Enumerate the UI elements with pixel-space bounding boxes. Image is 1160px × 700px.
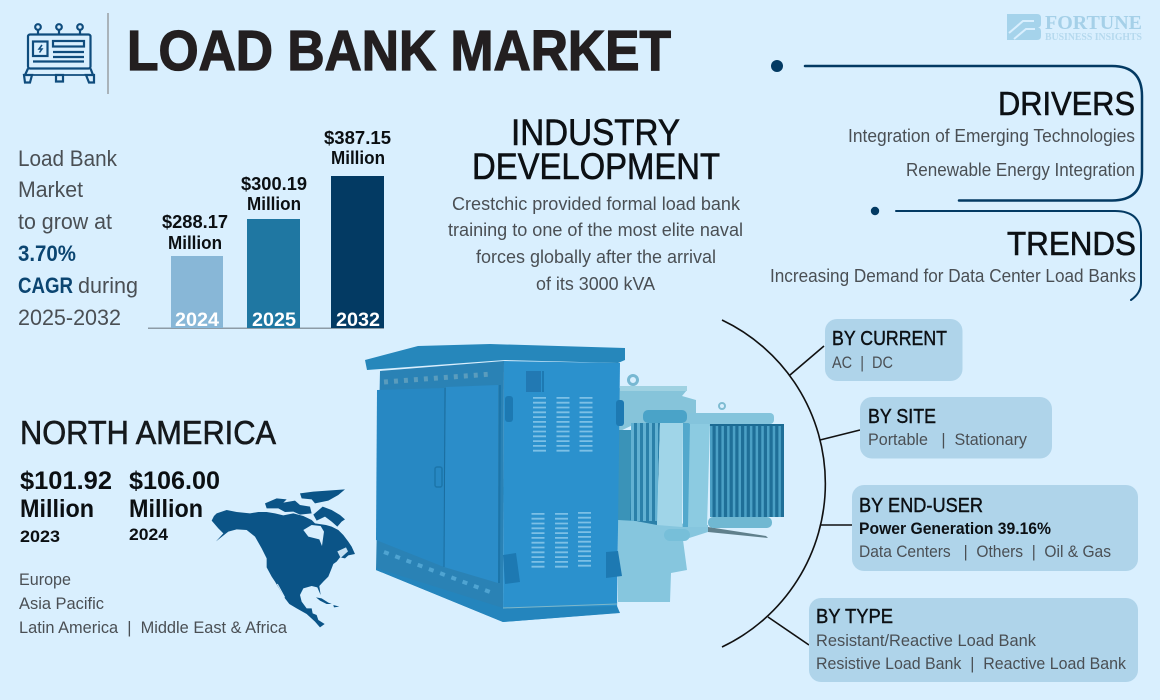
stat: 2023 value: $101.92: [20, 467, 112, 495]
heading: north america: NORTH AMERICA: [20, 414, 276, 451]
bar: 2032: 2032: [336, 309, 380, 331]
stat: 2024 value: $106.00: [129, 467, 220, 495]
text block: other regions: Latin America | Middle East & Africa: [19, 618, 288, 637]
panel: by type: [809, 598, 1138, 682]
stat: 2024 value: [129, 467, 220, 544]
panel: industry development: [448, 112, 743, 294]
text block: CAGR summary: during: [78, 273, 138, 298]
heading: industry development: [472, 112, 720, 187]
cabinet base: [376, 568, 620, 622]
bar: 2024: Million: [168, 233, 222, 253]
panel: drivers: DRIVERS: [998, 85, 1135, 122]
text block: CAGR summary: CAGR: [18, 273, 73, 298]
stat: 2024 value: 2024: [129, 525, 169, 544]
bar: 2025: $300.19: [241, 173, 307, 194]
panel: trends: Increasing Demand for Data Center Load Banks: [770, 266, 1136, 286]
text block: CAGR summary: 3.70%: [18, 241, 76, 266]
cabinet perforated band: [384, 374, 492, 382]
panel: by site: BY SITE: [868, 406, 936, 428]
text block: CAGR summary: [18, 146, 138, 330]
panel: by end-user: BY END-USER: [859, 495, 983, 517]
bar: 2025: [241, 173, 307, 331]
panel: by type: Resistive Load Bank | Reactive Load Bank: [816, 654, 1126, 673]
panel: by site: [860, 397, 1052, 458]
stat: 2023 value: 2023: [20, 527, 60, 546]
text block: CAGR summary: to grow at: [18, 209, 112, 234]
bar: 2025: 2025: [252, 309, 296, 331]
radiator fins: [710, 425, 784, 517]
vents: [538, 397, 586, 569]
cabinet right face: [503, 361, 620, 622]
stat: 2023 value: Million: [20, 495, 94, 523]
panel: by current: AC | DC: [832, 353, 893, 372]
bar: 2024: 2024: [175, 309, 219, 331]
bar: 2024: $288.17: [162, 211, 228, 232]
text block: industry development body: Crestchic provided formal load bank: [452, 194, 741, 214]
panel: by site: Portable | Stationary: [868, 430, 1027, 449]
stat: 2023 value: [20, 467, 112, 546]
bar: 2024: [162, 211, 228, 331]
cabinet marks and handles: [503, 371, 624, 584]
bar chart: market size: [148, 127, 391, 331]
title: LOAD BANK MARKET: [127, 19, 671, 83]
bar: 2032: [324, 127, 391, 331]
bar: 2032: Million: [331, 148, 385, 168]
transformer body: [618, 376, 784, 602]
stat: 2024 value: Million: [129, 495, 203, 523]
text block: industry development body: [448, 194, 743, 294]
illustration: load bank machine: [365, 344, 784, 622]
text block: industry development body: forces globally after the arrival: [476, 247, 716, 267]
text block: industry development body: of its 3000 kVA: [536, 274, 655, 294]
logo: Fortune Business Insights: [1007, 12, 1142, 43]
cabinet roof: [365, 344, 625, 370]
panel: trends: TRENDS: [1007, 225, 1136, 262]
text block: industry development body: training to one of the most elite naval: [448, 220, 743, 240]
panel: by current: [825, 319, 962, 381]
segmentation arc with connectors: [722, 320, 860, 647]
logo: Fortune Business Insights: BUSINESS INSIGHTS: [1045, 32, 1142, 43]
panel: by current: BY CURRENT: [832, 328, 947, 350]
panel: by end-user: [852, 485, 1138, 571]
heading: industry development: INDUSTRY: [511, 112, 680, 153]
text block: CAGR summary: Market: [18, 177, 83, 202]
text block: CAGR summary: Load Bank: [18, 146, 118, 171]
panel: by type: Resistant/Reactive Load Bank: [816, 631, 1036, 650]
cabinet doors: [376, 385, 500, 583]
icon: load bank unit: [24, 24, 94, 82]
text block: other regions: [19, 570, 288, 637]
panel: by end-user: Data Centers | Others | Oil & Gas: [859, 542, 1111, 561]
bar: 2032: $387.15: [324, 127, 391, 148]
cabinet left face: [376, 361, 504, 622]
panel: by type: BY TYPE: [816, 606, 893, 628]
panel: drivers: Renewable Energy Integration: [906, 160, 1135, 180]
logo: Fortune Business Insights: FORTUNE: [1045, 12, 1142, 34]
panel: trends: [770, 207, 1141, 300]
bar: 2025: Million: [247, 194, 301, 214]
map: north america: [212, 489, 355, 627]
text block: other regions: Asia Pacific: [19, 594, 104, 613]
panel: drivers: [771, 60, 1142, 200]
panel: drivers: Integration of Emerging Technologies: [848, 126, 1135, 146]
header divider: [107, 13, 109, 94]
panel: by end-user: Power Generation 39.16%: [859, 520, 1051, 538]
heading: industry development: DEVELOPMENT: [472, 146, 720, 187]
text block: CAGR summary: 2025-2032: [18, 305, 121, 330]
text block: other regions: Europe: [19, 570, 71, 589]
